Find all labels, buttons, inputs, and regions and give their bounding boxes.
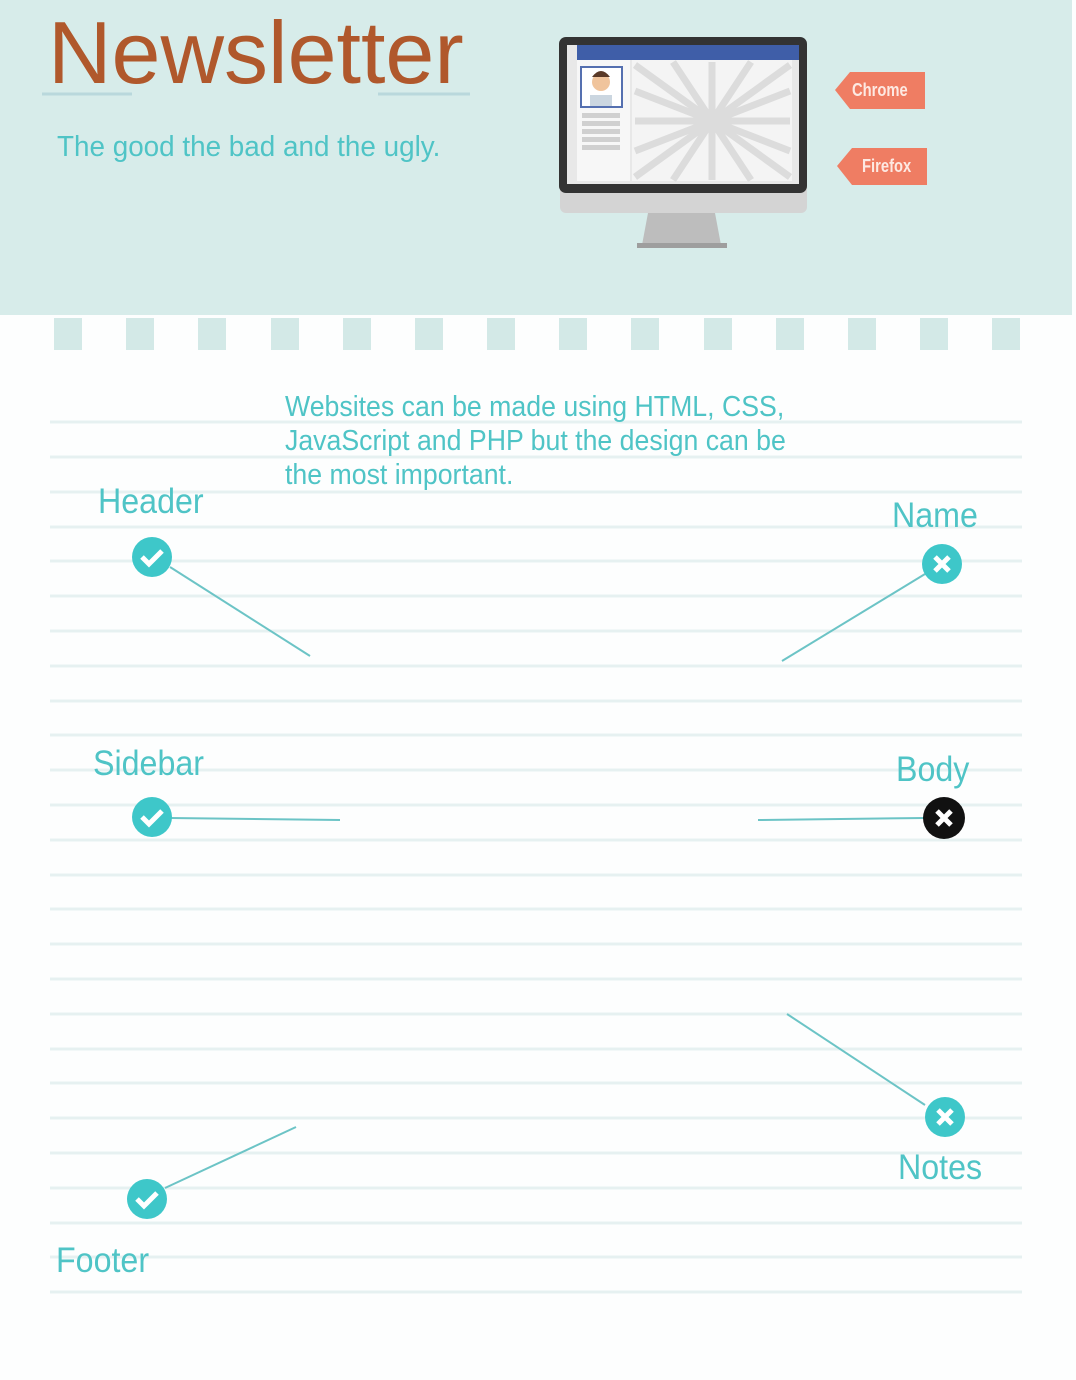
tag: Chrome: Chrome	[852, 80, 908, 100]
intro text: the most important.	[285, 459, 513, 491]
icon: cross notes	[925, 1097, 965, 1137]
icon: check footer	[127, 1179, 167, 1219]
title: Newsletter	[48, 3, 464, 102]
subtitle: The good the bad and the ugly.	[57, 131, 440, 163]
label: Notes: Notes	[898, 1148, 982, 1187]
monitor illustration	[559, 37, 807, 248]
intro text: JavaScript and PHP but the design can be	[285, 425, 786, 457]
icon: cross name	[922, 544, 962, 584]
label: Body: Body	[896, 750, 969, 789]
icon: cross body	[923, 797, 965, 839]
label: Footer: Footer	[56, 1241, 149, 1280]
label: Name: Name	[892, 496, 978, 535]
label: Sidebar: Sidebar	[93, 744, 204, 783]
intro text	[285, 391, 786, 491]
icon: check sidebar	[132, 797, 172, 837]
header band	[0, 0, 1072, 315]
intro text: Websites can be made using HTML, CSS,	[285, 391, 784, 423]
tag: Firefox: Firefox	[862, 156, 911, 176]
label: Header: Header	[98, 482, 204, 521]
icon: check header	[132, 537, 172, 577]
tag: Chrome	[835, 72, 925, 109]
tag: Firefox	[837, 148, 927, 185]
